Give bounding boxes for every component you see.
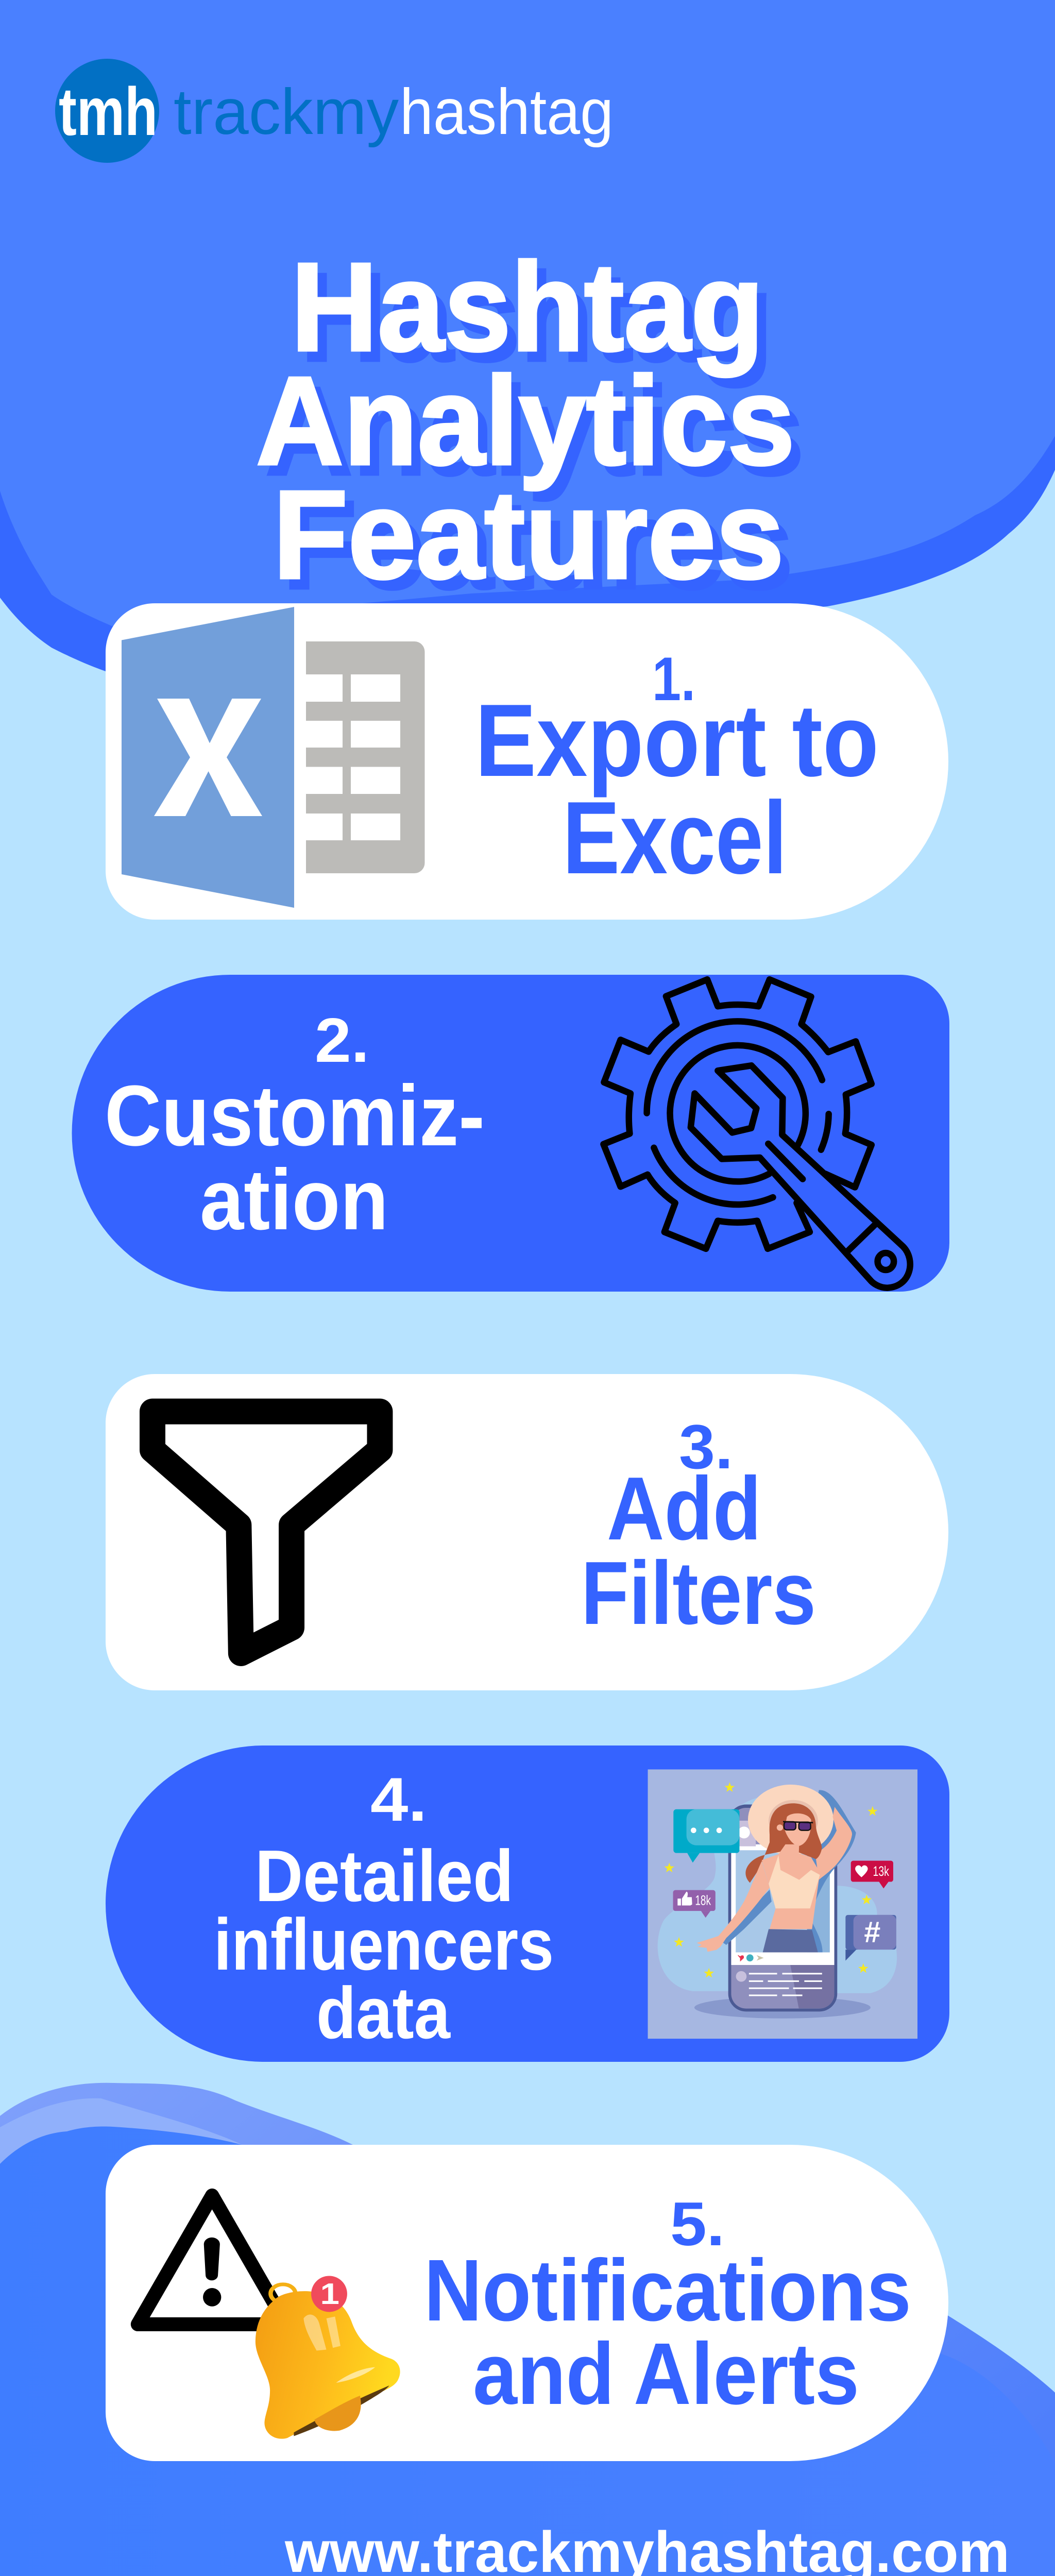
stars (664, 1782, 878, 1978)
bottom blue blob (0, 2083, 1055, 2576)
bell (256, 2276, 400, 2439)
text: 2. Customization: Customiz- (105, 1068, 485, 1164)
text: 4. Detailed influencers data: data (316, 1972, 451, 2054)
text: 1. Export to Excel: Excel (563, 781, 787, 895)
title (256, 236, 795, 605)
text: 1. Export to Excel: 1. (652, 645, 695, 714)
text: 3. Add Filters (581, 1412, 816, 1643)
phone (728, 1805, 837, 2011)
panel: 5 notifications and alerts (106, 2145, 948, 2461)
text: 3. Add Filters: 3. (679, 1412, 733, 1482)
logo monogram: tmh (59, 74, 158, 149)
heart bubble (851, 1861, 893, 1889)
illustration: influencer on phone (648, 1769, 917, 2039)
text: 4. Detailed influencers data: Detailed (255, 1835, 514, 1917)
text: 4. Detailed influencers data (214, 1765, 554, 2054)
logo: trackmyhashtag (55, 59, 614, 163)
bell: 1 (320, 2278, 339, 2311)
panel: 1 export to excel (106, 603, 948, 920)
text: 5. Notifications and Alerts: Notifications (424, 2242, 911, 2340)
text: 4. Detailed influencers data: 4. (370, 1765, 427, 1834)
icon: filter funnel (152, 1412, 380, 1653)
icon: excel (122, 607, 424, 908)
text: 1. Export to Excel: Export to (475, 683, 879, 798)
card background (72, 975, 949, 1292)
text: 1. Export to Excel (475, 645, 879, 895)
woman (696, 1785, 856, 1953)
card background (106, 1745, 949, 2062)
panel: 3 add filters (106, 1374, 948, 1690)
card background (106, 2145, 948, 2461)
like bubble (673, 1890, 716, 1918)
text: 2. Customization (105, 1005, 485, 1248)
text: 4. Detailed influencers data: influencers (214, 1904, 554, 1986)
text: 5. Notifications and Alerts: and Alerts (473, 2325, 859, 2423)
text: 5. Notifications and Alerts (424, 2190, 911, 2423)
title: Analytics (256, 350, 795, 491)
chat bubble (673, 1809, 739, 1862)
panel: 2 customization (72, 975, 949, 1292)
top blue blob (0, 0, 1055, 671)
title: Hashtag (291, 236, 764, 377)
logo circle (55, 59, 159, 163)
hashtag bubble: # (864, 1916, 880, 1948)
text: 3. Add Filters: Add (607, 1458, 761, 1558)
panel: 4 detailed influencers data (106, 1745, 949, 2062)
icon: gear and wrench (603, 979, 910, 1288)
card background (106, 1374, 948, 1690)
text: 3. Add Filters: Filters (581, 1543, 816, 1643)
text: 5. Notifications and Alerts: 5. (670, 2190, 725, 2259)
heart bubble: 13k (873, 1863, 889, 1879)
icon: warning triangle and bell (138, 2195, 400, 2439)
title: Features (273, 464, 784, 605)
text: 2. Customization: ation (200, 1152, 388, 1248)
hashtag bubble (845, 1915, 896, 1961)
logo wordmark: hashtag: hashtag (400, 76, 614, 148)
text: 2. Customization: 2. (315, 1005, 369, 1075)
logo wordmark: trackmy: trackmy (174, 76, 399, 148)
warning triangle (138, 2195, 286, 2324)
like bubble: 18k (695, 1893, 711, 1908)
card background (106, 603, 948, 920)
